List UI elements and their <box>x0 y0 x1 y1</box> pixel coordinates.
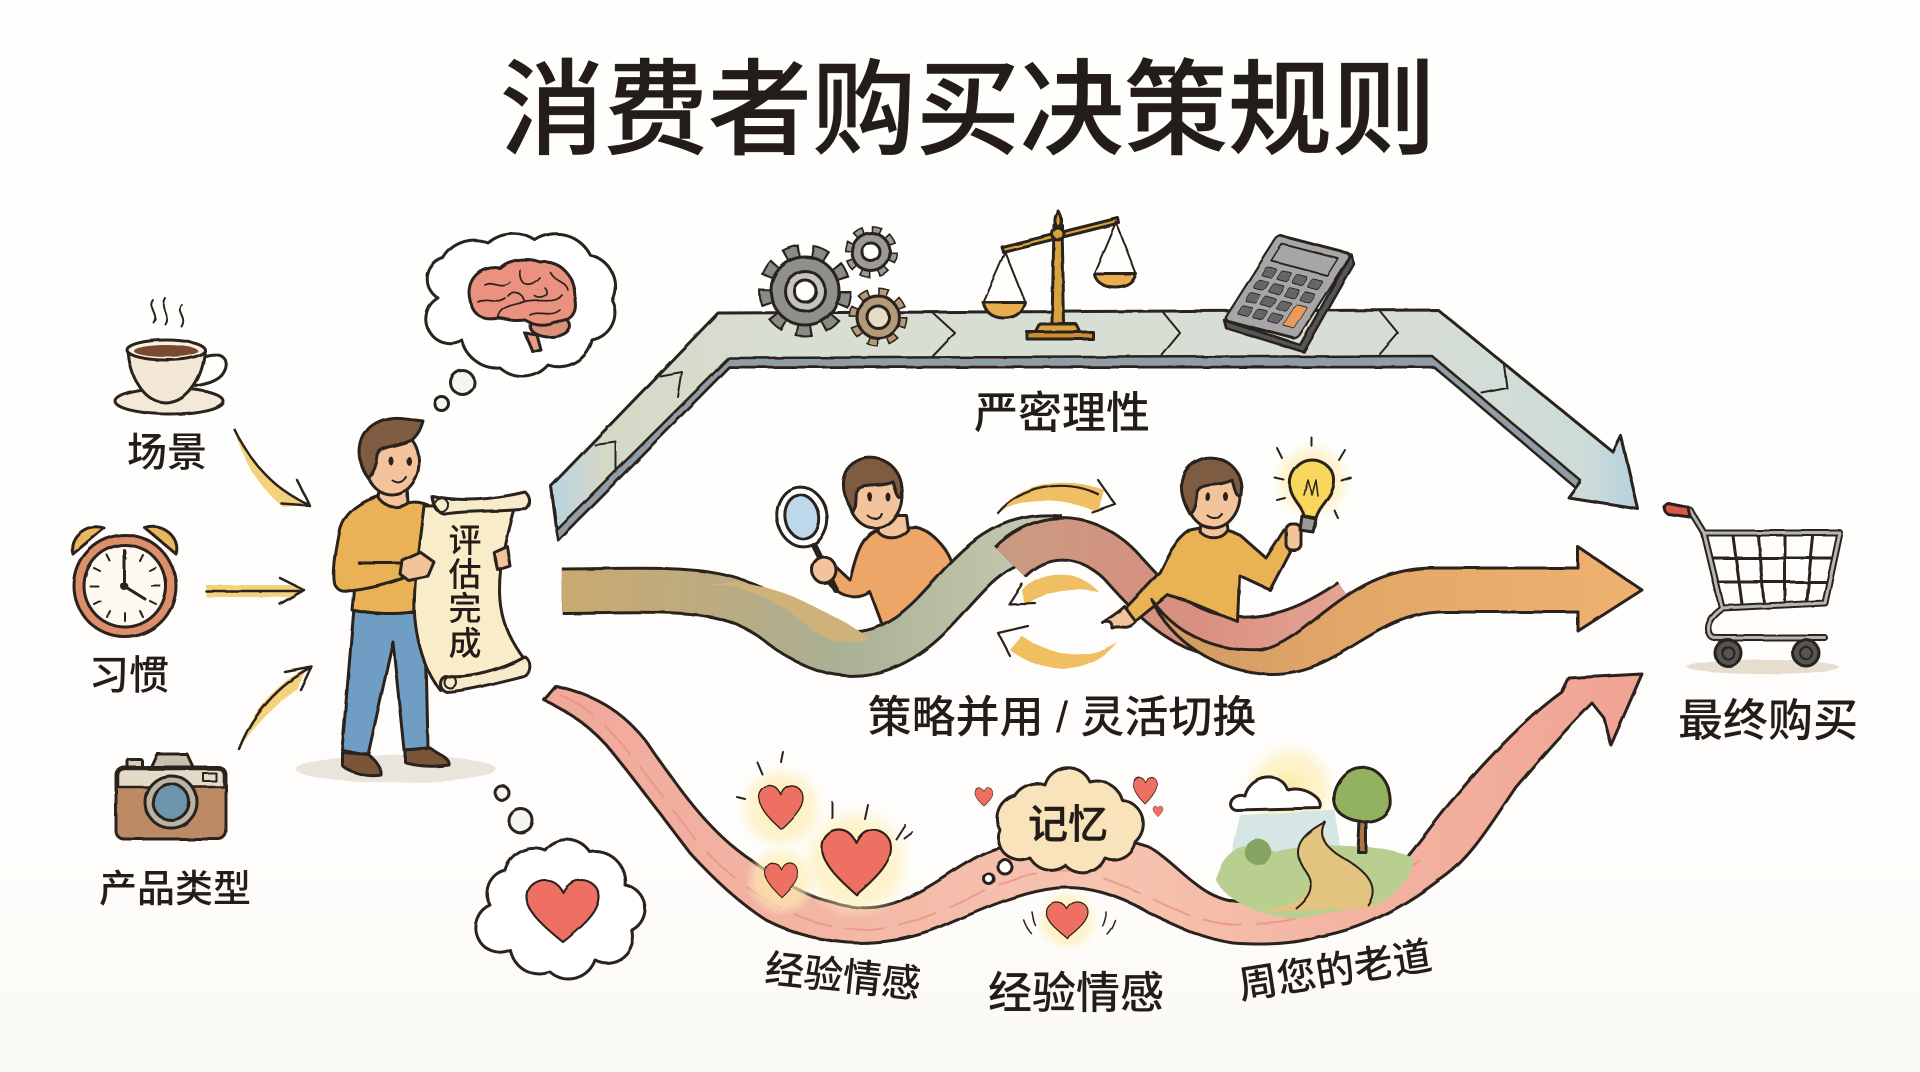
label: flexible switching: 策略并用 / 灵活切换 <box>868 693 1256 742</box>
switching arrow: bottom <box>998 626 1118 669</box>
label: final purchase: 最终购买 <box>1678 695 1858 746</box>
icon: gears <box>767 231 902 341</box>
icon: camera <box>116 754 226 839</box>
face <box>388 456 412 482</box>
person with lightbulb <box>1102 458 1301 628</box>
path: rational route arrow <box>551 211 1638 540</box>
scroll text: 成 <box>448 625 482 662</box>
basket grid <box>1712 536 1835 604</box>
icon: balance scale <box>983 211 1136 339</box>
switching arrow: middle <box>1009 575 1100 606</box>
path: flexible switching <box>562 438 1642 674</box>
ribbon: blended strand and arrowhead <box>1152 547 1642 674</box>
icon: shopping cart <box>1664 503 1840 674</box>
icon: brain <box>469 260 575 352</box>
memory cloud <box>975 768 1163 884</box>
person holding scroll <box>296 418 530 783</box>
arm and hands <box>353 546 510 590</box>
label: rational: 严密理性 <box>974 389 1150 438</box>
ground shadow <box>296 755 496 783</box>
arrow: habit to person <box>206 578 304 604</box>
label: familiar path: 周您的老道 <box>1236 935 1435 1008</box>
ribbon: analytic strand <box>562 537 1060 654</box>
lower edge band <box>556 356 1580 540</box>
person with magnifier <box>772 458 951 632</box>
scroll <box>414 492 530 692</box>
hair <box>360 418 423 478</box>
ribbon: intuitive strand <box>1010 539 1350 638</box>
switching arrow: top <box>998 480 1115 513</box>
handle <box>1664 503 1690 517</box>
path: emotional route <box>544 674 1642 952</box>
icon: calculator <box>1224 235 1354 352</box>
ribbon with arrowhead <box>544 674 1642 944</box>
icon: glowing hearts <box>737 752 914 920</box>
thought bubbles <box>435 370 474 411</box>
arrow: scene to person <box>235 430 310 508</box>
icon: heart <box>527 880 599 942</box>
thought: heart <box>475 786 645 979</box>
cloud <box>475 840 645 979</box>
icon: small heart below ribbon <box>1024 888 1115 952</box>
icon: coffee cup <box>115 298 226 414</box>
shoes <box>342 748 449 776</box>
label: habit: 习惯 <box>89 654 169 698</box>
icon: landscape with winding road <box>1216 742 1414 918</box>
sweater <box>334 495 428 614</box>
arrow body <box>551 310 1638 540</box>
icon: alarm clock <box>72 527 177 637</box>
arrow: product to person <box>239 667 312 749</box>
label: product type: 产品类型 <box>99 869 251 911</box>
neck <box>378 484 408 507</box>
thought: brain <box>426 234 615 411</box>
wheels <box>1715 640 1819 666</box>
label: scene: 场景 <box>127 431 207 475</box>
basket frame <box>1690 510 1840 638</box>
scroll text: 估 <box>448 556 482 593</box>
scroll text: 完 <box>448 590 482 627</box>
panel: situational factors <box>72 298 312 839</box>
cloud <box>426 234 615 377</box>
memory text: 记忆 <box>1028 803 1108 847</box>
head <box>365 429 419 495</box>
icon: lightbulb <box>1272 438 1352 532</box>
label: experience emotion center: 经验情感 <box>988 969 1164 1018</box>
trousers <box>342 608 428 755</box>
chevron dividers <box>595 311 1507 472</box>
ribbon shading strokes <box>560 695 1420 930</box>
label: experience emotion left: 经验情感 <box>763 948 923 1007</box>
scroll text: 评 <box>448 522 482 559</box>
thought bubbles <box>495 786 533 833</box>
title: 消费者购买决策规则 <box>500 53 1436 169</box>
